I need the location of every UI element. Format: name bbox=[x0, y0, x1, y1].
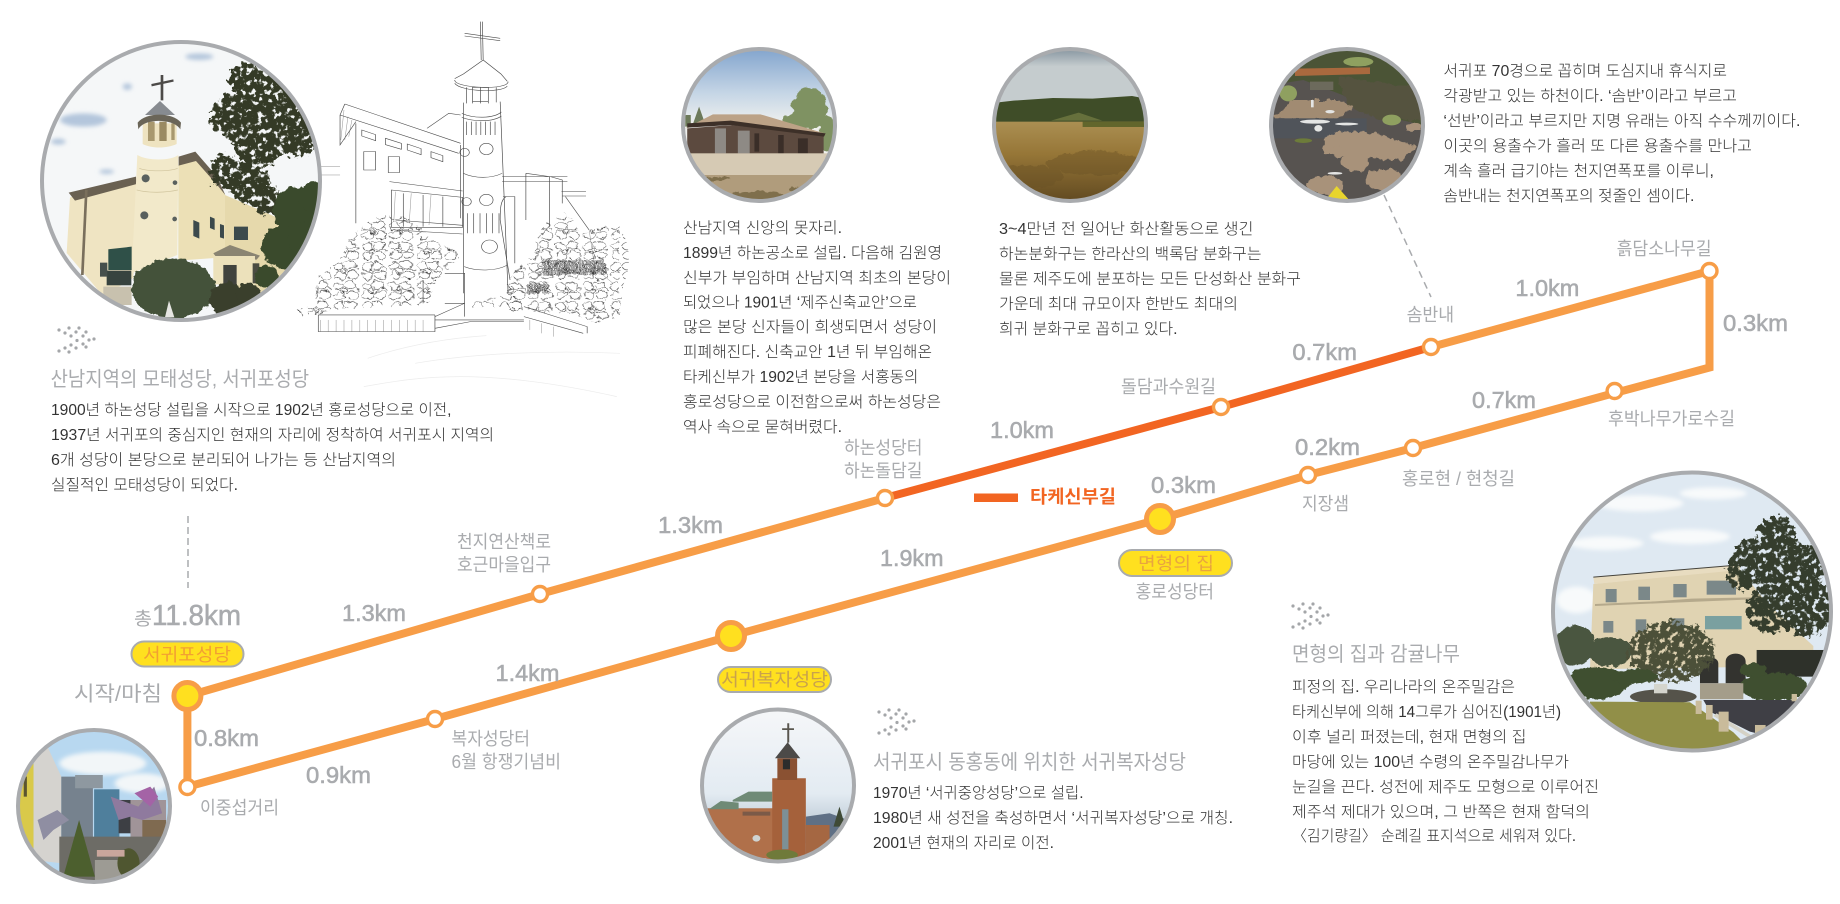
stop name labels: 지장샘 bbox=[1302, 494, 1349, 514]
pill: Seogwipo cathedral bbox=[132, 642, 244, 666]
text block: Hanon cathedral description: 홍로성당으로 이전함으로써 하논성당은 bbox=[683, 393, 941, 411]
photo: Seogwipo cathedral bbox=[40, 40, 330, 330]
route: walking trail loop bbox=[187, 271, 1709, 787]
stop name labels: 복자성당터 bbox=[452, 729, 530, 749]
text block: Hanon cathedral description: 산남지역 신앙의 못자리. bbox=[683, 219, 842, 237]
text block: Hanon crater description: 하논분화구는 한라산의 백록담 분화구는 bbox=[999, 245, 1262, 263]
heading: Seogwi Bokja cathedral: 서귀포시 동홍동에 위치한 서귀복자성당 bbox=[873, 751, 1186, 774]
distance labels: 0.3km bbox=[1151, 472, 1216, 498]
text block: Seogwi Bokja description bbox=[873, 784, 1233, 852]
total distance: 총 bbox=[134, 609, 152, 629]
photo: Myeonhyeong house bbox=[1551, 470, 1833, 752]
text block: Hanon cathedral description bbox=[683, 219, 951, 436]
text block: Hanon cathedral description: 신부가 부임하며 산남지역 최초의 본당이 bbox=[683, 269, 951, 287]
route: Takke highlighted section bbox=[885, 347, 1431, 498]
text block: Seogwi Bokja description: 2001년 현재의 자리로 이전. bbox=[873, 834, 1054, 852]
text block: mother cathedral description: 실질적인 모태성당이 되었다. bbox=[51, 476, 238, 494]
distance labels: 0.3km bbox=[1723, 310, 1788, 336]
distance labels: 1.0km bbox=[990, 417, 1054, 443]
text block: Hanon cathedral description: 피폐해진다. 신축교안 1년 뒤 부임해온 bbox=[683, 343, 932, 361]
text block: Seogwi Bokja description: 1970년 ‘서귀중앙성당’으로 설립. bbox=[873, 784, 1084, 802]
dashed leader: Sombannae photo to route bbox=[1384, 195, 1431, 297]
text block: Hanon crater description: 희귀 분화구로 꼽히고 있다. bbox=[999, 320, 1178, 338]
text block: Myeonhyeong house description: 눈길을 끈다. 성전에 제주도 모형으로 이루어진 bbox=[1292, 778, 1599, 796]
text block: Myeonhyeong house description bbox=[1292, 678, 1599, 845]
text block: Myeonhyeong house description: 〈김기량길〉 순례길 표지석으로 세워져 있다. bbox=[1292, 827, 1576, 845]
stop name labels: 홍로성당터 bbox=[1136, 582, 1214, 602]
photo: Hanon cathedral site bbox=[679, 47, 837, 203]
legend: Takke trail: 타케신부길 bbox=[1030, 487, 1116, 507]
stop name labels: 하논성당터 bbox=[844, 438, 922, 458]
photo: Lee Jung-seop street bbox=[14, 727, 176, 885]
text block: Hanon crater description bbox=[999, 220, 1301, 338]
stop name labels: 시작/마침 bbox=[74, 683, 162, 706]
text block: Hanon cathedral description: 역사 속으로 묻혀버렸다. bbox=[683, 418, 842, 436]
distance labels: 1.9km bbox=[880, 545, 944, 571]
text block: Sombannae description: 이곳의 용출수가 흘러 또 다른 용출수를 만나고 bbox=[1443, 137, 1752, 155]
pill: Myeonhyeong house: 면형의 집 bbox=[1138, 554, 1214, 574]
distance labels: 0.9km bbox=[306, 762, 371, 788]
text block: Hanon cathedral description: 타케신부가 1902년 본당을 서홍동의 bbox=[683, 368, 918, 386]
text block: Myeonhyeong house description: 마당에 있는 100년 수령의 온주밀감나무가 bbox=[1292, 753, 1569, 771]
stop name labels: 천지연산책로 bbox=[457, 532, 551, 552]
text block: Myeonhyeong house description: 이후 널리 퍼졌는데, 현재 면형의 집 bbox=[1292, 728, 1526, 746]
stop name labels: 흙담소나무길 bbox=[1617, 239, 1712, 259]
text block: Sombannae description bbox=[1443, 62, 1800, 205]
text block: Hanon cathedral description: 되었으나 1901년 ‘제주신축교안’으로 bbox=[683, 294, 917, 312]
text block: mother cathedral description bbox=[51, 401, 494, 494]
text block: mother cathedral description: 1900년 하논성당 설립을 시작으로 1902년 홍로성당으로 이전, bbox=[51, 401, 451, 419]
text block: Sombannae description: 솜반내는 천지연폭포의 젖줄인 셈이다. bbox=[1443, 187, 1694, 205]
pill: Seogwi Bokja cathedral: 서귀복자성당 bbox=[721, 670, 828, 690]
text block: Hanon crater description: 가운데 최대 규모이자 한반도 최대의 bbox=[999, 295, 1238, 313]
stop name labels: 하논돌담길 bbox=[844, 461, 922, 481]
stop name labels: 호근마을입구 bbox=[457, 555, 551, 575]
pill: Myeonhyeong house bbox=[1119, 550, 1232, 576]
text block: Myeonhyeong house description: 제주석 제대가 있으며, 그 반쪽은 현재 함덕의 bbox=[1292, 803, 1590, 821]
distance labels: 1.4km bbox=[496, 660, 560, 686]
illustration continuation: foliage edge of sketch bbox=[620, 230, 629, 300]
distance labels: 0.7km bbox=[1472, 387, 1536, 413]
text block: Myeonhyeong house description: 피정의 집. 우리나라의 온주밀감은 bbox=[1292, 678, 1515, 696]
distance labels: 0.2km bbox=[1295, 434, 1360, 460]
main stops: churches bbox=[174, 506, 1173, 710]
distance labels: 1.3km bbox=[342, 600, 406, 626]
illustration: sketch of Seogwipo cathedral bbox=[297, 22, 620, 397]
distance labels: 0.7km bbox=[1292, 339, 1357, 365]
text block: Seogwi Bokja description: 1980년 새 성전을 축성하면서 ‘서귀복자성당’으로 개칭. bbox=[873, 809, 1233, 827]
icon: dotted arrow bbox=[57, 326, 96, 354]
text block: Sombannae description: 서귀포 70경으로 꼽히며 도심지내 휴식지로 bbox=[1443, 62, 1727, 80]
photo: Seogwi Bokja cathedral bbox=[699, 707, 857, 865]
text block: Sombannae description: ‘선반’이라고 부르지만 지명 유래는 아직 수수께끼이다. bbox=[1443, 112, 1800, 130]
stop name labels: 후박나무가로수길 bbox=[1608, 409, 1735, 429]
icon: dotted arrow bbox=[877, 708, 916, 736]
pill: Seogwipo cathedral: 서귀포성당 bbox=[143, 645, 231, 665]
stop name labels: 홍로현 / 현청길 bbox=[1402, 469, 1515, 489]
text block: Sombannae description: 계속 흘러 급기야는 천지연폭포를 이루니, bbox=[1443, 162, 1714, 180]
text block: mother cathedral description: 6개 성당이 본당으로 분리되어 나가는 등 산남지역의 bbox=[51, 451, 396, 469]
photo: Sombannae stream bbox=[1269, 47, 1425, 203]
heading: Myeonhyeong house: 면형의 집과 감귤나무 bbox=[1292, 643, 1460, 666]
stop name labels: 이중섭거리 bbox=[200, 798, 279, 818]
total distance: 11.8km bbox=[152, 600, 241, 632]
stop name labels: 솜반내 bbox=[1407, 305, 1454, 325]
text block: Hanon crater description: 3~4만년 전 일어난 화산활동으로 생긴 bbox=[999, 220, 1254, 238]
icon: dotted arrow bbox=[1291, 602, 1330, 630]
distance labels: 1.0km bbox=[1515, 275, 1579, 301]
heading: mother cathedral: 산남지역의 모태성당, 서귀포성당 bbox=[51, 368, 309, 391]
text block: Myeonhyeong house description: 타케신부에 의해 14그루가 심어진(1901년) bbox=[1292, 703, 1561, 721]
stop name labels: 돌담과수원길 bbox=[1121, 377, 1216, 397]
text block: Sombannae description: 각광받고 있는 하천이다. ‘솜반’이라고 부르고 bbox=[1443, 87, 1737, 105]
distance labels bbox=[194, 275, 1788, 788]
stop name labels: 6월 항쟁기념비 bbox=[452, 752, 561, 772]
text block: Hanon cathedral description: 1899년 하논공소로 설립. 다음해 김원영 bbox=[683, 244, 942, 262]
distance labels: 0.8km bbox=[194, 725, 259, 751]
text block: mother cathedral description: 1937년 서귀포의 중심지인 현재의 자리에 정착하여 서귀포시 지역의 bbox=[51, 426, 494, 444]
stop name labels bbox=[74, 239, 1735, 818]
text block: Hanon cathedral description: 많은 본당 신자들이 희생되면서 성당이 bbox=[683, 318, 937, 336]
dashed leader: cathedral text to start bbox=[187, 516, 189, 588]
route stops bbox=[180, 264, 1717, 794]
text block: Hanon crater description: 물론 제주도에 분포하는 모든 단성화산 분화구 bbox=[999, 270, 1301, 288]
legend: Takke trail bbox=[974, 487, 1116, 507]
photo: Hanon crater field bbox=[990, 47, 1150, 203]
distance labels: 1.3km bbox=[658, 512, 723, 538]
